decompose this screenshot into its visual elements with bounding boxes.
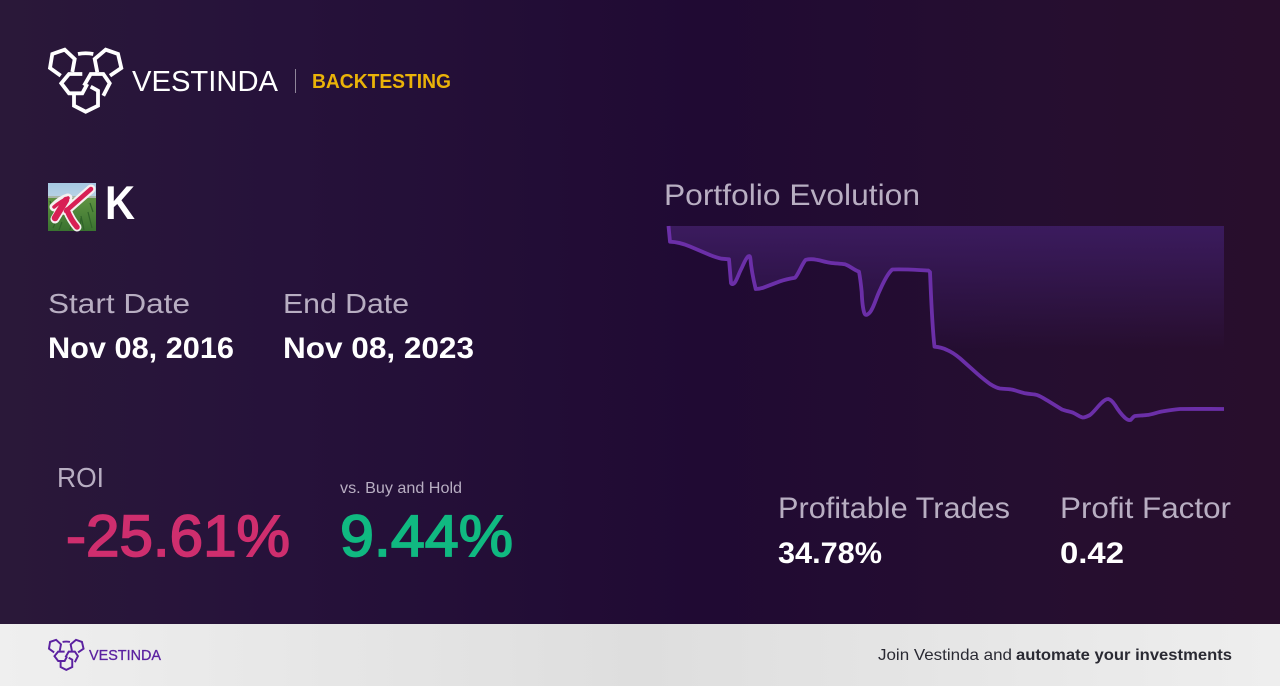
header divider (295, 69, 296, 93)
profitable trades value: 34.78% (778, 537, 882, 570)
start date label: Start Date (48, 288, 190, 319)
ROI value: -25.61% (66, 504, 290, 569)
footer call to action: Join Vestinda and (878, 647, 1012, 664)
footer bar (0, 624, 1280, 686)
ticker: K: K (105, 176, 135, 229)
ROI label: ROI (57, 462, 104, 493)
footer logo: Vestinda hexagon mark (49, 640, 84, 670)
icon: Kellogg's K logo on field (48, 183, 96, 231)
profit factor value: 0.42 (1060, 537, 1124, 570)
vs. buy and hold value: 9.44% (340, 504, 513, 569)
end date value: Nov 08, 2023 (283, 332, 474, 365)
vs. buy and hold label: vs. Buy and Hold (340, 480, 462, 497)
footer wordmark: VESTINDA: VESTINDA (89, 647, 161, 664)
profit factor label: Profit Factor (1060, 492, 1231, 525)
header logo: Vestinda hexagon mark (50, 50, 121, 112)
header label: BACKTESTING: BACKTESTING (312, 71, 451, 93)
end date label: End Date (283, 288, 409, 319)
chart title: Portfolio Evolution: Portfolio Evolution (664, 179, 920, 212)
footer call to action: automate your investments (1016, 647, 1232, 664)
header wordmark: VESTINDA: VESTINDA (132, 66, 279, 98)
profitable trades label: Profitable Trades (778, 492, 1010, 525)
start date value: Nov 08, 2016 (48, 332, 234, 365)
chart: portfolio evolution line with area fill (668, 226, 1224, 420)
